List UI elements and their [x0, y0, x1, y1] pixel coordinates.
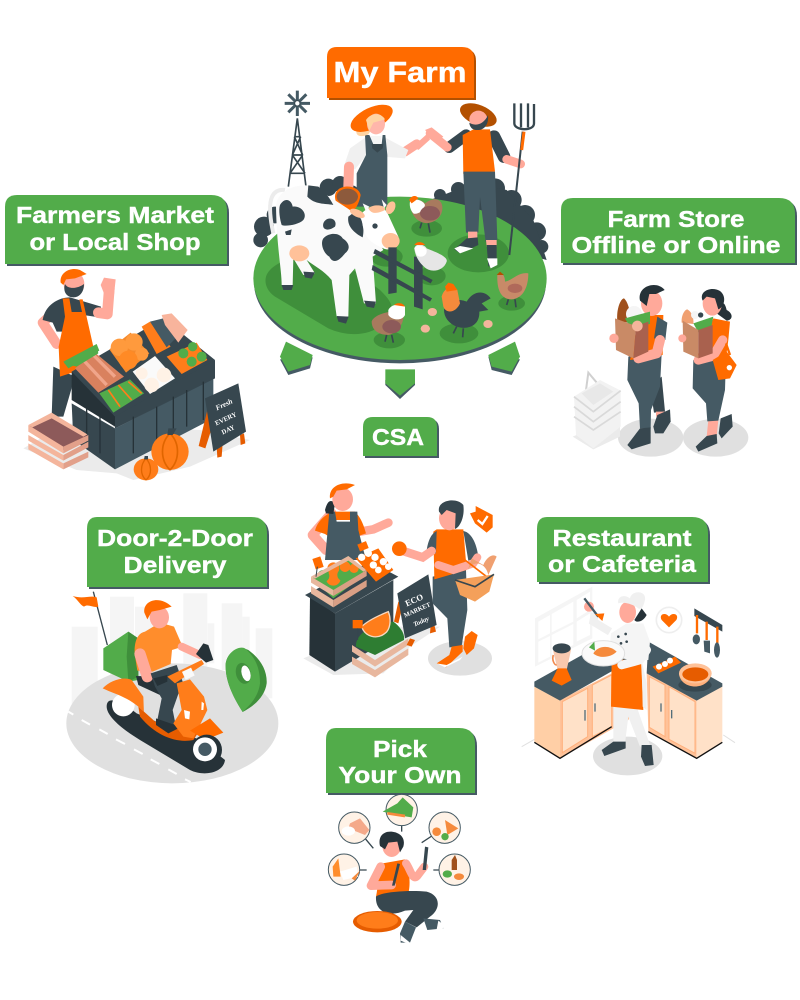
panel: CSA stand [303, 483, 497, 677]
seller [43, 269, 116, 417]
heading: my farm [327, 47, 476, 100]
sign: eco market: ECO [404, 591, 425, 608]
shoppers illustration [573, 285, 748, 457]
sign: eco market: MARKET [403, 601, 433, 619]
crate: watermelon [352, 612, 408, 677]
heading: farmers market: or Local Shop [30, 229, 200, 255]
delivery illustration [66, 592, 278, 783]
heading: farm store: Offline or Online [572, 232, 780, 258]
sign: fresh every day: EVERY [214, 411, 238, 427]
floor shadow [23, 423, 250, 480]
road dashes [68, 712, 191, 782]
farm illustration [253, 91, 548, 399]
heading: farm store [561, 198, 797, 265]
CSA illustration [303, 483, 497, 677]
heading: farmers market: Farmers Market [16, 202, 214, 228]
shadows [573, 417, 748, 457]
flag [73, 592, 107, 645]
seller woman [313, 483, 388, 560]
basket [455, 555, 497, 602]
produce crate [311, 556, 367, 607]
woman shopper [678, 289, 737, 452]
icon: map pin [226, 648, 267, 712]
icon: windmill [285, 91, 310, 187]
bushes [253, 176, 548, 260]
panel: door-2-door delivery [66, 517, 278, 783]
city skyline [72, 593, 272, 713]
heading: farmers market [5, 195, 229, 266]
window [535, 587, 592, 667]
customer man [392, 500, 478, 667]
hen 4 [372, 303, 405, 343]
panel: farmers market [5, 195, 250, 480]
sign: fresh every day: DAY [221, 424, 236, 436]
heading: restaurant: Restaurant [552, 525, 692, 551]
eggs tray [356, 541, 393, 582]
hen 2 white [414, 242, 447, 271]
chicks [421, 308, 493, 333]
panel: my farm [253, 47, 548, 399]
man shopper [609, 285, 671, 449]
hen 3 [497, 272, 528, 307]
heading: door-2-door: Delivery [124, 552, 227, 578]
pumpkins [134, 428, 189, 480]
arrow: centre [385, 369, 415, 399]
scooter rear [103, 679, 200, 741]
heading: door-2-door [87, 517, 269, 589]
scooter front [167, 660, 223, 765]
arrow: right [488, 342, 520, 375]
fence [372, 247, 433, 309]
hen 1 [409, 196, 442, 233]
sign: eco market: Today [412, 615, 430, 628]
heading: pick your own [326, 728, 477, 795]
wall tools [693, 608, 722, 658]
heading: CSA: CSA [372, 424, 424, 450]
bowl [678, 663, 712, 692]
road disc [66, 663, 278, 783]
food bubbles [328, 794, 470, 885]
sign: fresh every day [199, 383, 246, 458]
arrow: left [280, 342, 313, 375]
floor lines [522, 733, 735, 747]
kitchen illustration [522, 587, 735, 775]
scooter shadow [107, 700, 225, 773]
rooster [442, 283, 491, 337]
icon: heart bubble [656, 607, 682, 633]
market illustration [23, 269, 250, 480]
produce [64, 313, 207, 413]
panel: pick your own [326, 728, 477, 944]
sign: fresh every day: Fresh [214, 397, 234, 412]
counter [534, 642, 722, 758]
panel: restaurant [522, 517, 735, 775]
rider [135, 600, 213, 733]
heading: farm store: Farm Store [608, 206, 744, 232]
heading: restaurant: or Cafeteria [548, 551, 696, 577]
sign: eco market [394, 574, 437, 647]
heading: CSA [363, 417, 439, 458]
pick-your-own illustration [328, 794, 470, 944]
cow [270, 185, 400, 324]
heading: restaurant [537, 517, 710, 584]
green island [253, 197, 547, 363]
badge: check [470, 506, 493, 533]
heading: door-2-door: Door-2-Door [97, 525, 253, 551]
farmer man [425, 98, 534, 268]
panel: farm store [561, 198, 797, 457]
baskets [574, 373, 621, 448]
table [305, 562, 398, 672]
cutting board [653, 657, 681, 673]
heading: pick your own: Your Own [338, 762, 462, 788]
heading: my farm: My Farm [334, 57, 466, 89]
delivery box [103, 632, 138, 682]
plate [353, 911, 402, 932]
stall [72, 318, 215, 469]
blender [552, 643, 572, 686]
chef [582, 592, 662, 775]
farmer woman [335, 99, 428, 213]
crate [28, 413, 88, 469]
floor shadow [303, 627, 492, 676]
diner [371, 832, 444, 944]
heading: pick your own: Pick [373, 736, 427, 762]
